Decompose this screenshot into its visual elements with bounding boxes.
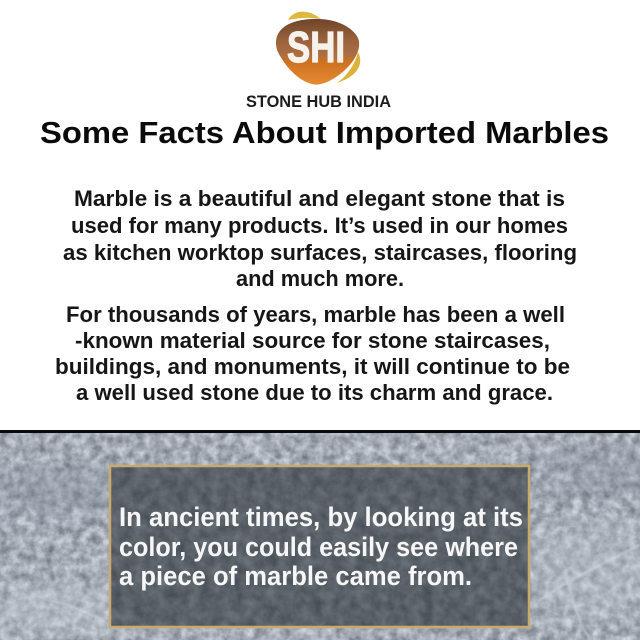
icon: gold swoosh right	[337, 52, 360, 83]
text block: intro paragraph	[63, 186, 577, 291]
panel: marble background	[0, 430, 640, 640]
text block: history paragraph: -known material source for stone staircases,	[75, 328, 550, 353]
callout text: color, you could easily see where	[119, 532, 518, 562]
title: Some Facts About Imported Marbles	[40, 115, 609, 150]
logo wordmark: STONE HUB INDIA	[246, 92, 391, 111]
callout text: In ancient times, by looking at its	[119, 502, 523, 532]
icon: brown rounded badge	[276, 19, 359, 85]
callout text: a piece of marble came from.	[119, 561, 472, 591]
text block: history paragraph: a well used stone due to its charm and grace.	[76, 380, 553, 405]
text block: intro paragraph: as kitchen worktop surfaces, staircases, flooring	[63, 240, 577, 265]
text block: history paragraph: For thousands of years, marble has been a well	[66, 302, 565, 327]
callout: fact box	[110, 466, 529, 627]
icon: gold swoosh top	[288, 12, 321, 20]
callout text	[119, 502, 523, 591]
text block: history paragraph: buildings, and monuments, it will continue to be	[55, 354, 570, 379]
logo: Stone Hub India	[246, 12, 391, 111]
text block: intro paragraph: used for many products. It’s used in our homes	[71, 213, 568, 238]
text block: intro paragraph: Marble is a beautiful and elegant stone that is	[74, 186, 565, 211]
text block: intro paragraph: and much more.	[236, 266, 404, 291]
logo letters: SHI	[287, 23, 345, 72]
text block: history paragraph	[55, 302, 570, 405]
